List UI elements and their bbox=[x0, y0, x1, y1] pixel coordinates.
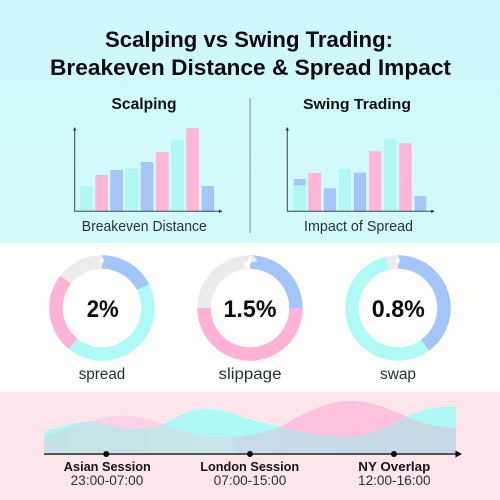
area chart: session waves bbox=[44, 401, 456, 454]
panel: cost donuts bbox=[0, 243, 500, 392]
heading: scalping: Scalping bbox=[112, 96, 176, 113]
donut: slippage 1.5%: slippage bbox=[218, 366, 282, 383]
session: asian: Asian Session bbox=[64, 459, 151, 474]
session: asian: 23:00-07:00 bbox=[71, 473, 143, 488]
session: london bbox=[200, 459, 299, 488]
heading: swing trading: Swing Trading bbox=[303, 96, 411, 113]
donut: slippage 1.5%: 1.5% bbox=[224, 296, 276, 323]
donut: spread 2% bbox=[56, 256, 148, 383]
panel: top comparison bbox=[0, 0, 500, 243]
session: london: London Session bbox=[200, 459, 299, 474]
title: Scalping vs Swing Trading: bbox=[105, 27, 393, 52]
label: impact of spread: Impact of Spread bbox=[304, 219, 413, 235]
donut: swap 0.8%: 0.8% bbox=[372, 296, 425, 323]
donut: spread 2%: 2% bbox=[87, 296, 119, 323]
label: breakeven distance: Breakeven Distance bbox=[82, 219, 207, 235]
donut: swap 0.8% bbox=[352, 256, 444, 383]
panel: trading sessions bbox=[0, 392, 500, 500]
title bbox=[50, 27, 452, 80]
bar chart: scalping bbox=[73, 127, 222, 213]
session: ny overlap bbox=[358, 459, 431, 488]
session: asian bbox=[64, 459, 151, 488]
donut: spread 2%: spread bbox=[79, 366, 125, 383]
donut: slippage 1.5% bbox=[204, 256, 296, 383]
session: london: 07:00-15:00 bbox=[214, 473, 286, 488]
timeline axis bbox=[44, 450, 462, 458]
bar chart: swing trading bbox=[286, 127, 435, 213]
session: ny overlap: NY Overlap bbox=[358, 459, 430, 474]
title: Breakeven Distance & Spread Impact bbox=[50, 55, 452, 80]
session: ny overlap: 12:00-16:00 bbox=[358, 473, 431, 488]
donut: swap 0.8%: swap bbox=[380, 366, 416, 383]
